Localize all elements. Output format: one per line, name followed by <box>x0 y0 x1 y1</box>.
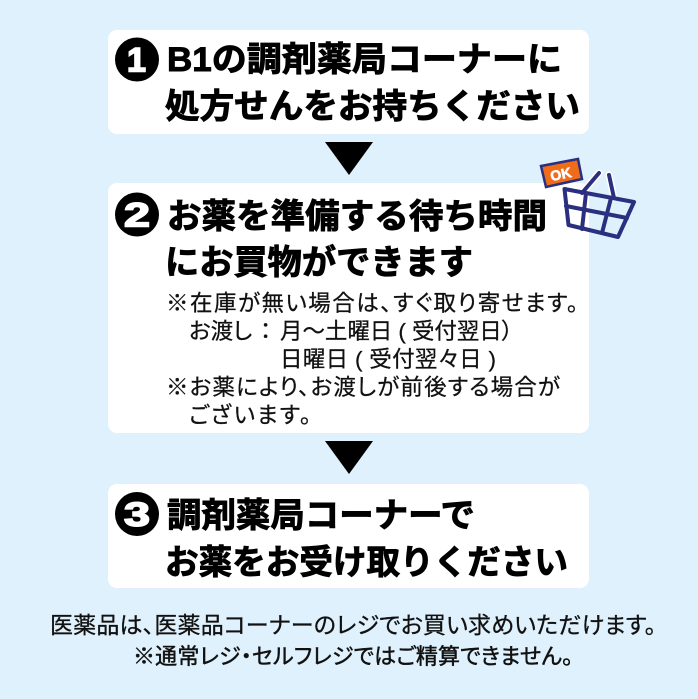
text: stock notes: ： <box>260 319 271 344</box>
icon: shopping basket with OK tag <box>541 159 634 237</box>
arrow: step 2 to 3 <box>325 441 373 474</box>
text: stock notes: ※お薬により、お渡しが前後する場合が <box>166 375 560 400</box>
text: stock notes <box>166 291 578 428</box>
text: stock notes: ※在庫が無い場合は、すぐ取り寄せます。 <box>166 291 578 316</box>
text: stock notes: ございます。 <box>189 402 311 428</box>
heading: step 2 line 2: にお買物ができます <box>165 243 473 282</box>
icon: number 1 <box>115 38 159 82</box>
heading: step 1 line 2: 処方せんをお持ちください <box>165 88 580 126</box>
icon: number 2: 2 <box>124 196 150 234</box>
icon: number 1: 1 <box>127 42 146 80</box>
icon: basket <box>564 173 634 237</box>
heading: step 3 line 1: 調剤薬局コーナーで <box>167 497 475 535</box>
heading: step 3 line 2: お薬をお受け取りください <box>165 544 568 582</box>
text: stock notes: お渡し <box>189 319 252 344</box>
icon: number 3 <box>115 492 159 536</box>
heading: step 1 line 1: B1の調剤薬局コーナーに <box>167 41 562 79</box>
footer note line 2: ※通常レジ・セルフレジではご精算できません。 <box>133 644 573 669</box>
heading: step 2 line 1: お薬を準備する待ち時間 <box>167 198 547 236</box>
icon: number 3: 3 <box>124 496 150 534</box>
footer note line 1: 医薬品は、医薬品コーナーのレジでお買い求めいただけます。 <box>50 612 656 638</box>
panel: step 3 <box>108 484 589 588</box>
text: stock notes: 月～土曜日 ( 受付翌日） <box>280 319 513 344</box>
icon: number 2 <box>115 192 159 236</box>
text: stock notes: 日曜日 ( 受付翌々日 ) <box>280 347 496 372</box>
panel: step 2 <box>108 183 589 433</box>
panel: step 1 <box>108 30 589 134</box>
icon: OK tag: OK <box>549 164 573 184</box>
arrow: step 1 to 2 <box>325 142 373 175</box>
